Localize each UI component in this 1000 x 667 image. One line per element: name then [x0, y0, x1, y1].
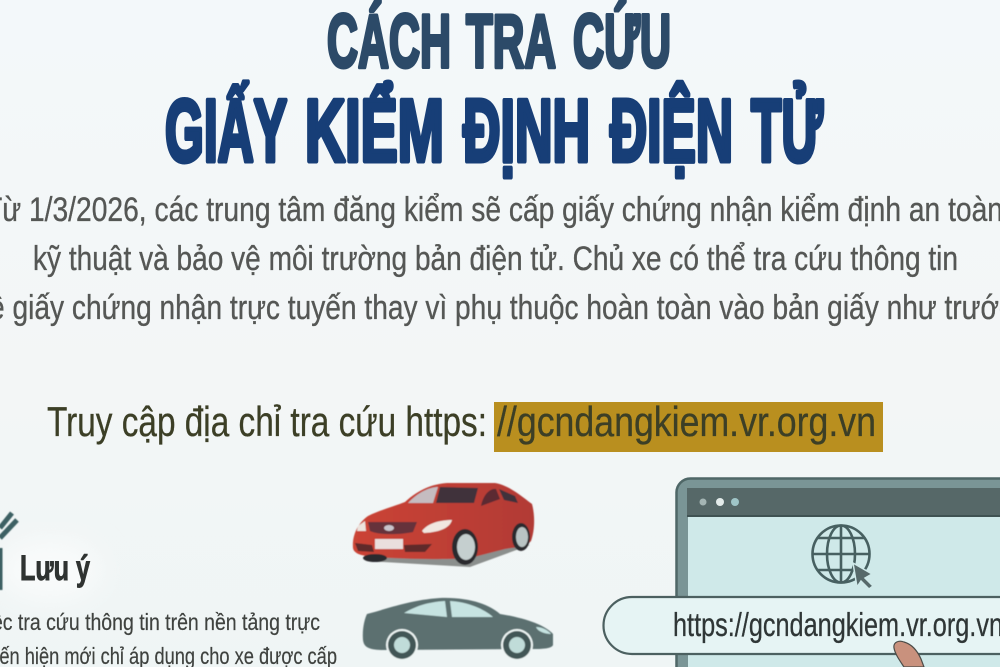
address bar: [603, 597, 1000, 654]
title line 2: GIẤY: [165, 81, 287, 180]
note heading: Lưu ý: [20, 549, 90, 588]
address label: Truy cập địa chỉ tra cứu https:: [47, 398, 487, 445]
title line 1: [327, 0, 671, 83]
note section: [0, 513, 337, 667]
intro paragraph: [0, 191, 1000, 327]
title line 1: TRA: [466, 0, 556, 83]
icon: pointing finger: [894, 641, 924, 667]
title line 2: TỬ: [751, 81, 823, 180]
icon: grey car: [363, 598, 553, 661]
icon: red car: [353, 483, 534, 567]
highlighted address: //gcndangkiem.vr.org.vn: [497, 398, 876, 445]
title: [165, 0, 823, 180]
title line 1: CÁCH: [327, 0, 451, 83]
title line 2: [165, 81, 823, 180]
icon: globe with cursor: [812, 526, 873, 589]
icon: pen: [0, 513, 17, 590]
title line 2: ĐỊNH: [463, 81, 590, 180]
access address line: [47, 398, 883, 452]
title line 2: ĐIỆN: [610, 81, 733, 180]
browser window: [676, 478, 1000, 667]
title line 1: CỨU: [573, 0, 671, 83]
title line 2: KIỂM: [305, 81, 444, 180]
note text: [0, 609, 337, 667]
browser illustration: [603, 478, 1000, 667]
